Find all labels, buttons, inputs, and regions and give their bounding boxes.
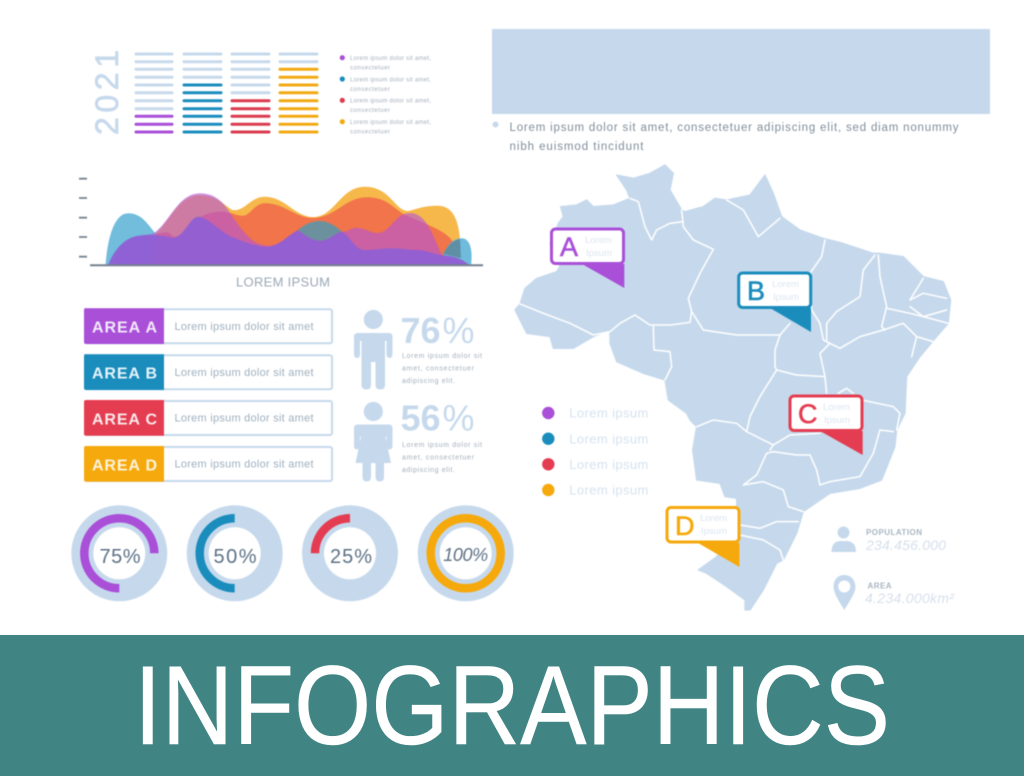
callout: C: Ipsum xyxy=(824,415,850,426)
stat: 56% xyxy=(400,398,482,474)
stat: population xyxy=(832,526,946,553)
map of Brazil xyxy=(515,165,951,610)
callout: D: Ipsum xyxy=(701,526,727,537)
stat: 56%: 56% xyxy=(400,398,475,439)
callout: A: Lorem xyxy=(585,235,612,246)
legend: line chart: consectetuer xyxy=(350,87,390,93)
legend: line chart: Lorem ipsum dolor sit amet, xyxy=(350,120,431,126)
icon: person xyxy=(832,526,856,552)
donut: 50% xyxy=(187,505,283,601)
legend: line chart: consectetuer xyxy=(350,108,390,114)
intro text: Lorem ipsum dolor sit amet, consectetuer adipiscing elit, sed diam nonummy xyxy=(510,122,959,134)
callout: C xyxy=(790,396,863,455)
callout: B xyxy=(739,273,811,332)
legend: map xyxy=(542,406,648,498)
state borders xyxy=(520,198,948,560)
panel: stacked line chart 2021 xyxy=(89,50,317,135)
stat: 76%: amet, consectetuer xyxy=(402,366,475,372)
row: area C xyxy=(84,400,332,436)
panel: area list xyxy=(84,308,332,482)
donut: 25%: 25% xyxy=(330,546,372,568)
baseline xyxy=(90,264,483,266)
row: area C: Lorem ipsum dolor sit amet xyxy=(174,413,314,425)
legend: line chart: Lorem ipsum dolor sit amet, xyxy=(350,56,431,62)
panel: progress donuts xyxy=(71,505,514,601)
callout: B: Lorem xyxy=(772,279,799,290)
callout: C: C xyxy=(798,399,818,429)
donut: 75%: 75% xyxy=(100,546,141,568)
callout: D xyxy=(667,508,740,567)
legend: line chart xyxy=(340,55,431,135)
callout: D: Lorem xyxy=(700,513,727,524)
callout: A xyxy=(552,229,624,288)
row: area D: AREA D xyxy=(92,457,157,474)
donut: 50%: 50% xyxy=(214,546,257,568)
row: area B xyxy=(84,354,332,390)
line column: purple xyxy=(136,54,172,132)
stat: 76%: 76% xyxy=(400,310,475,351)
stat: 76%: Lorem ipsum dolor sit xyxy=(402,353,482,360)
row: area A xyxy=(84,308,332,344)
line column: yellow xyxy=(280,54,317,132)
legend: line chart: consectetuer xyxy=(350,66,390,72)
country silhouette xyxy=(515,165,951,610)
banner title: INFOGRAPHICS xyxy=(134,643,890,768)
area chart xyxy=(79,179,483,290)
row: area B: Lorem ipsum dolor sit amet xyxy=(174,367,314,379)
stat: area xyxy=(834,575,955,610)
panel: gender stats xyxy=(354,310,482,482)
stat: population: POPULATION xyxy=(866,528,922,537)
heading block xyxy=(492,29,990,114)
donut: 25% xyxy=(302,505,398,601)
row: area A: Lorem ipsum dolor sit amet xyxy=(174,321,314,333)
legend: line chart: Lorem ipsum dolor sit amet, xyxy=(350,99,431,105)
icon: female figure xyxy=(354,402,392,482)
legend: map: Lorem ipsum xyxy=(569,431,648,446)
row: area C: AREA C xyxy=(92,411,157,428)
chart caption: LOREM IPSUM xyxy=(236,274,330,290)
stat: 56%: adipiscing elit. xyxy=(402,467,455,474)
stat: area: 4.234.000km² xyxy=(865,590,955,606)
donut: 100%: 100% xyxy=(443,545,488,565)
donut: 75% xyxy=(71,505,167,601)
legend: line chart: Lorem ipsum dolor sit amet, xyxy=(350,77,431,83)
stat: 76% xyxy=(400,310,482,385)
callout: B: Ipsum xyxy=(773,292,799,303)
callout: D: D xyxy=(675,511,694,541)
overlapping waves xyxy=(106,187,472,265)
row: area D: Lorem ipsum dolor sit amet xyxy=(174,459,314,471)
stat: 56%: Lorem ipsum dolor sit xyxy=(402,442,482,449)
intro text: nibh euismod tincidunt xyxy=(510,141,644,153)
row: area A: AREA A xyxy=(92,320,157,336)
row: area D xyxy=(84,446,332,482)
legend: map: Lorem ipsum xyxy=(569,483,648,498)
line column: red xyxy=(232,54,269,132)
legend: line chart: consectetuer xyxy=(350,130,390,136)
intro text xyxy=(492,122,959,153)
year label: 2021 xyxy=(89,50,125,135)
line column: blue xyxy=(184,54,221,132)
row: area B: AREA B xyxy=(92,366,157,382)
callout: C: Lorem xyxy=(823,402,850,413)
stat: 56%: amet, consectetuer xyxy=(402,454,475,462)
stat: population: 234.456.000 xyxy=(865,537,946,553)
stat: area: AREA xyxy=(868,581,892,590)
banner xyxy=(0,635,1024,776)
icon: male figure xyxy=(354,310,392,390)
axis ticks xyxy=(79,179,87,257)
callout: B: B xyxy=(747,276,765,306)
icon: map pin xyxy=(834,575,856,610)
legend: map: Lorem ipsum xyxy=(569,457,648,472)
stat: 76%: adipiscing elit. xyxy=(402,378,455,385)
callout: A: Ipsum xyxy=(586,248,612,259)
donut: 100% xyxy=(418,505,514,601)
infographic body xyxy=(71,29,990,610)
legend: map: Lorem ipsum xyxy=(569,406,648,421)
callout: A: A xyxy=(560,232,578,262)
